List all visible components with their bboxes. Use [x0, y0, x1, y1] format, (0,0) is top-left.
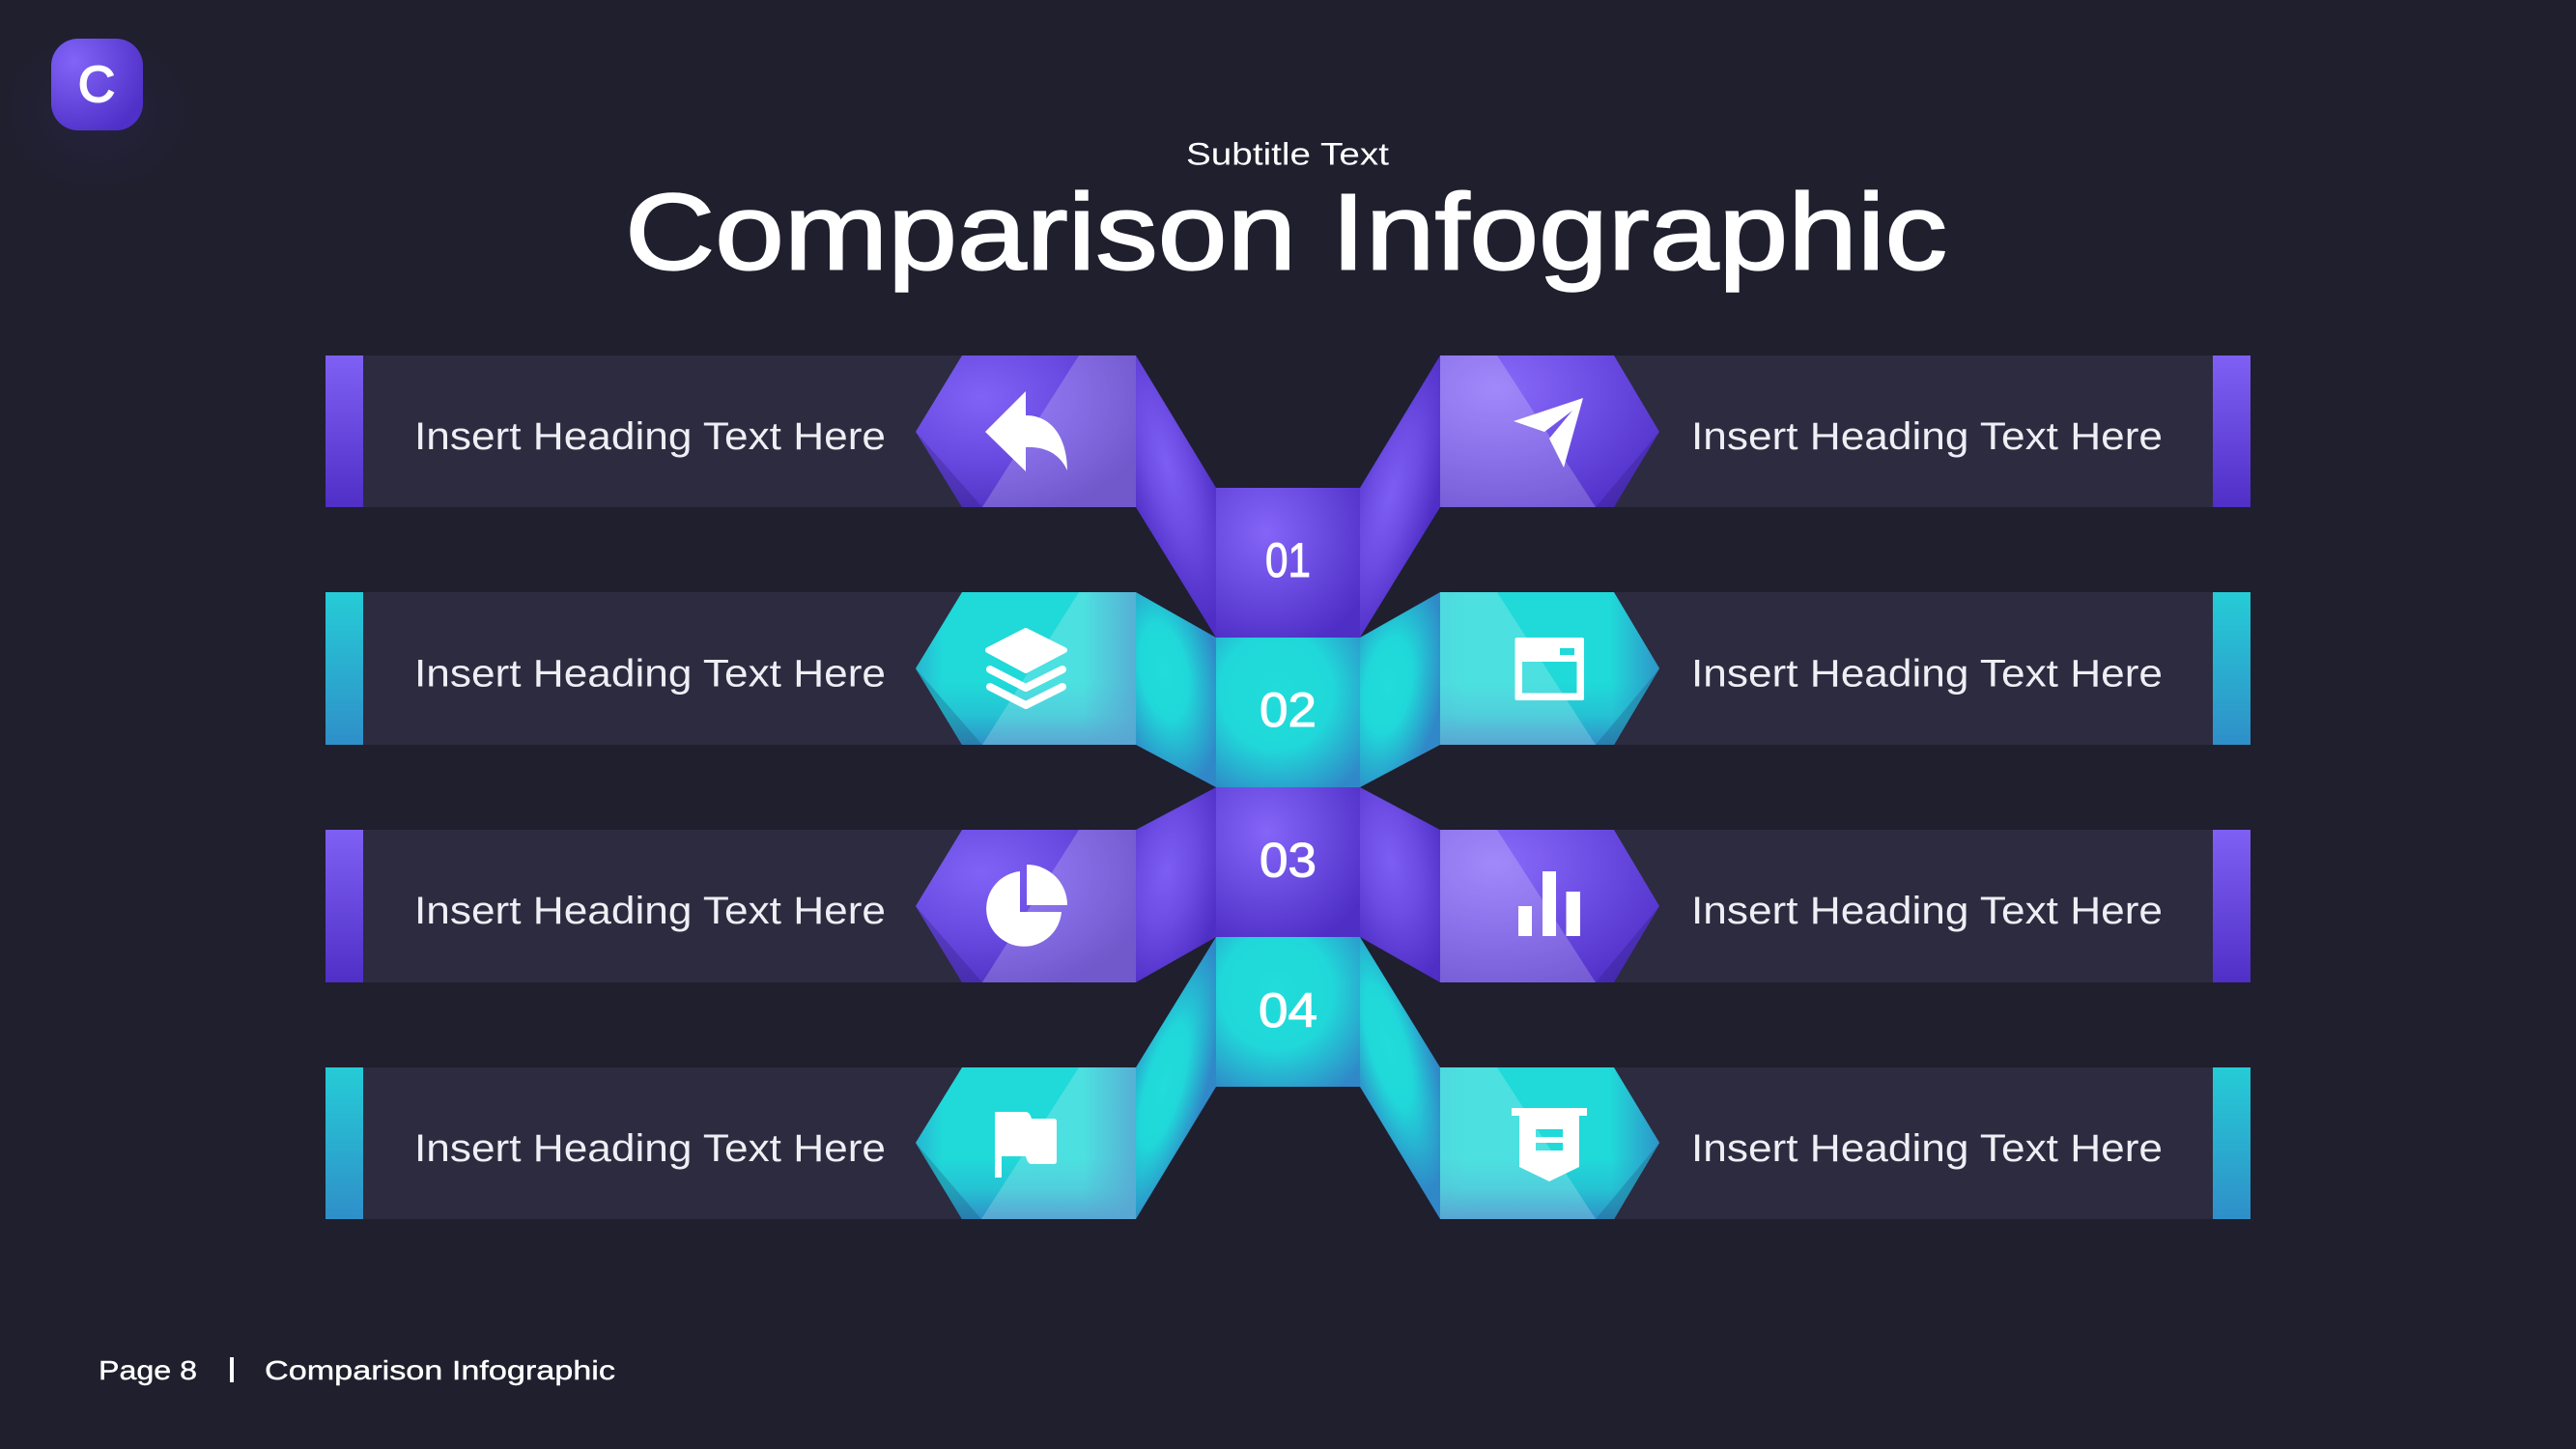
- heading text: Insert Heading Text Here: [414, 415, 886, 458]
- center wings row 4: [1136, 937, 1440, 1219]
- number block 04: 04: [1259, 983, 1317, 1037]
- footer: Comparison Infographic: [265, 1355, 615, 1385]
- footer: Page 8: [99, 1355, 197, 1385]
- subtitle: Subtitle Text: [1186, 137, 1389, 172]
- hexagon tab: [916, 592, 1136, 745]
- hexagon tab: [1440, 830, 1659, 982]
- heading panel: [363, 592, 981, 745]
- heading text: Insert Heading Text Here: [1691, 890, 2163, 932]
- accent bar: [326, 592, 363, 745]
- right item 1: [1440, 355, 2250, 507]
- logo badge: C: [78, 57, 115, 113]
- icon: reply arrow: [985, 391, 1067, 471]
- heading text: Insert Heading Text Here: [414, 890, 886, 932]
- hexagon tab: [1440, 355, 1659, 507]
- heading text: Insert Heading Text Here: [1691, 1127, 2163, 1170]
- heading panel: [1595, 830, 2213, 982]
- number block 01: [1216, 488, 1360, 638]
- left item 2: [326, 592, 1136, 745]
- accent bar: [2213, 1067, 2250, 1219]
- number block 03: [1216, 787, 1360, 937]
- heading panel: [1595, 355, 2213, 507]
- heading panel: [363, 830, 981, 982]
- icon: flag: [995, 1112, 1057, 1178]
- left item 4: [326, 1067, 1136, 1219]
- accent bar: [2213, 830, 2250, 982]
- left item 1: [326, 355, 1136, 507]
- heading panel: [363, 1067, 981, 1219]
- hexagon tab: [916, 355, 1136, 507]
- center wings row 1: [1136, 355, 1440, 638]
- hexagon tab: [916, 830, 1136, 982]
- icon: browser window: [1514, 638, 1584, 700]
- accent bar: [326, 830, 363, 982]
- icon: banner: [1512, 1108, 1587, 1181]
- accent bar: [2213, 355, 2250, 507]
- number block 02: [1216, 638, 1360, 787]
- right item 3: [1440, 830, 2250, 982]
- logo badge: [0, 29, 193, 193]
- heading panel: [363, 355, 981, 507]
- number block 02: 02: [1260, 683, 1316, 737]
- number block 03: 03: [1260, 833, 1316, 887]
- left item 3: [326, 830, 1136, 982]
- heading text: Insert Heading Text Here: [1691, 415, 2163, 458]
- heading text: Insert Heading Text Here: [414, 653, 886, 696]
- heading text: Insert Heading Text Here: [414, 1127, 886, 1170]
- center wings row 3: [1136, 787, 1440, 982]
- icon: layers: [988, 631, 1064, 705]
- hexagon tab: [1440, 1067, 1659, 1219]
- accent bar: [2213, 592, 2250, 745]
- heading panel: [1595, 592, 2213, 745]
- hexagon tab: [1440, 592, 1659, 745]
- number block 01: 01: [1265, 533, 1311, 587]
- right item 2: [1440, 592, 2250, 745]
- right item 4: [1440, 1067, 2250, 1219]
- number block 04: [1216, 937, 1360, 1087]
- heading text: Insert Heading Text Here: [1691, 653, 2163, 696]
- icon: bar chart: [1518, 871, 1580, 936]
- center wings row 2: [1136, 592, 1440, 787]
- accent bar: [326, 355, 363, 507]
- hexagon tab: [916, 1067, 1136, 1219]
- icon: pie chart: [986, 865, 1067, 947]
- footer: [99, 1355, 615, 1385]
- heading panel: [1595, 1067, 2213, 1219]
- title: Comparison Infographic: [625, 172, 1947, 292]
- accent bar: [326, 1067, 363, 1219]
- icon: paper plane: [1514, 398, 1583, 468]
